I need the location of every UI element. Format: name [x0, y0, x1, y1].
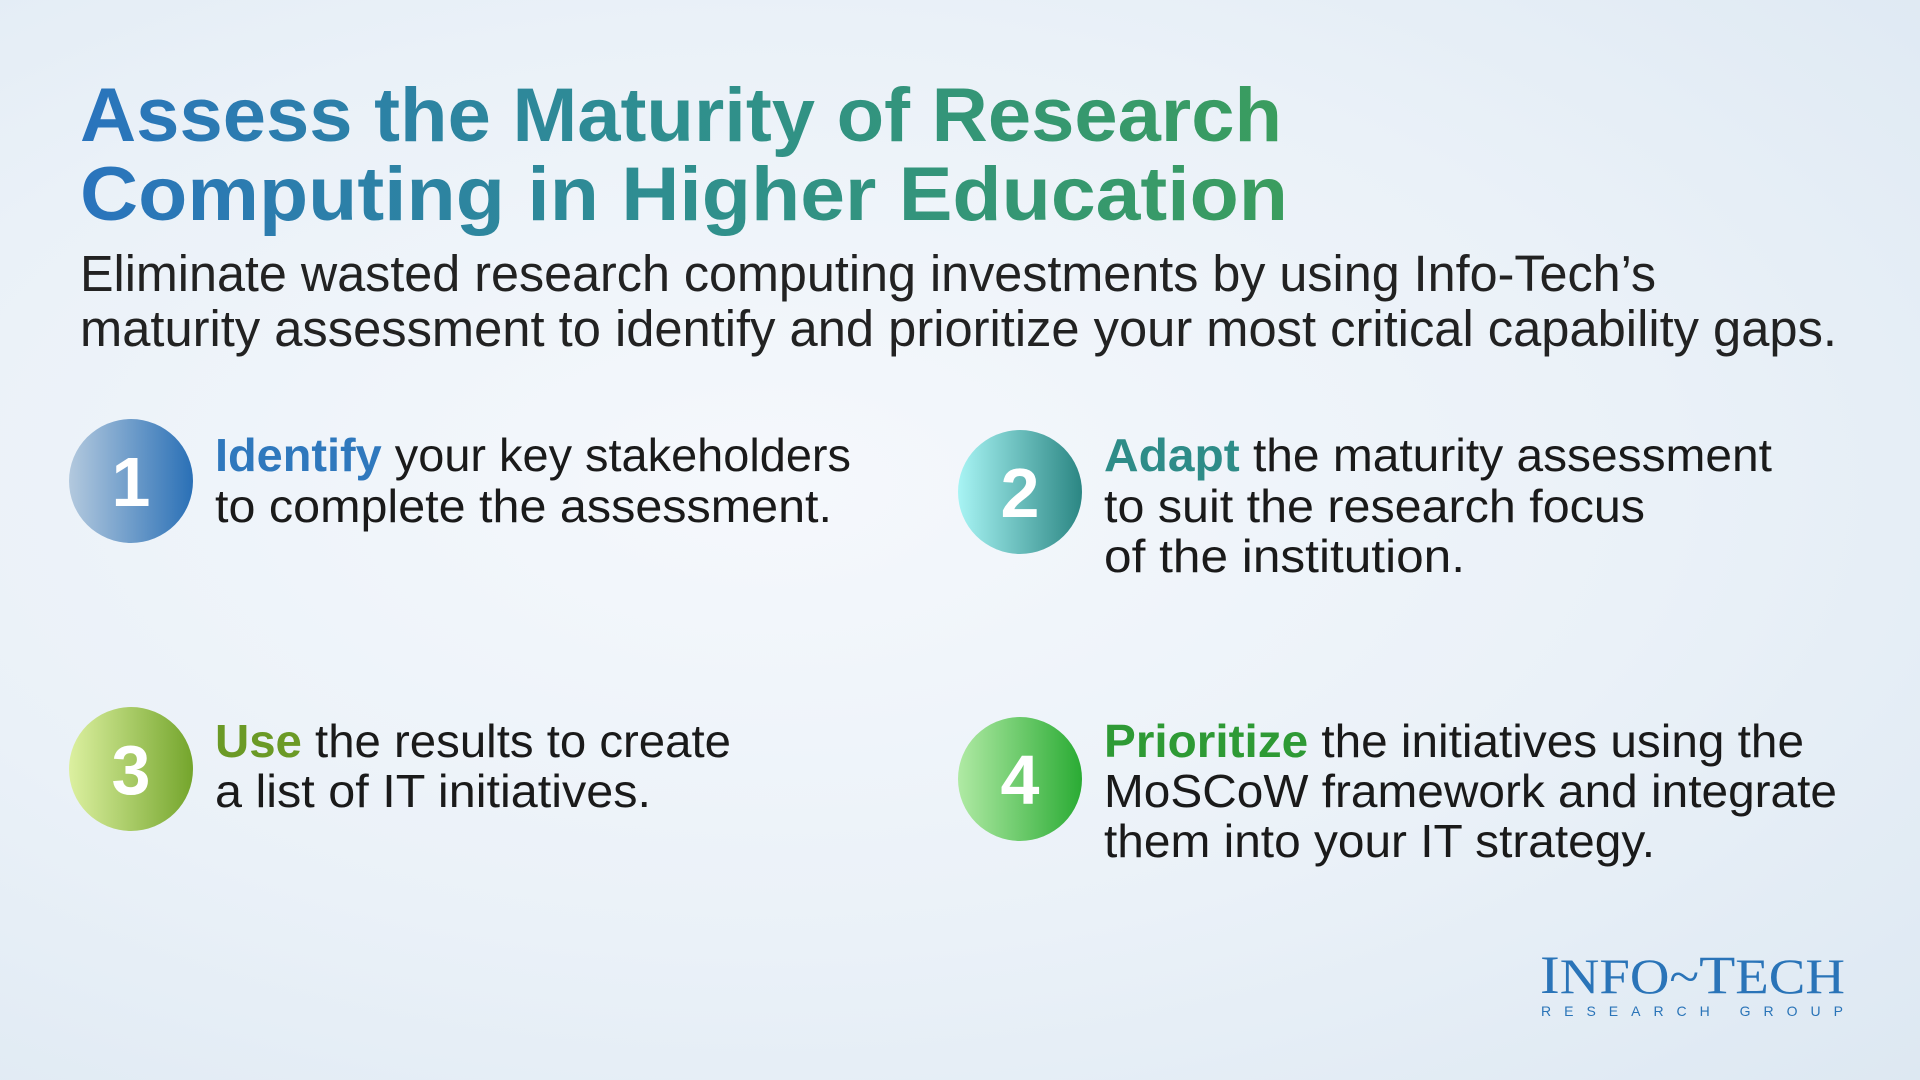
text: step 1 — [215, 429, 851, 532]
text: step 3: Use the results to create — [215, 715, 731, 767]
icon: circle 4 — [958, 717, 1082, 841]
icon: circle 3: 3 — [112, 731, 150, 809]
icon: circle 2 — [958, 430, 1082, 554]
text: step 2: to suit the research focus — [1104, 480, 1645, 532]
text: step 4: them into your IT strategy. — [1104, 815, 1655, 867]
logo: RESEARCH GROUP — [1541, 1003, 1843, 1019]
text: step 2: of the institution. — [1104, 530, 1465, 582]
subtitle — [80, 245, 1837, 357]
subtitle: maturity assessment to identify and prioritize your most critical capability gaps. — [80, 300, 1837, 357]
step 3 — [69, 707, 731, 831]
text: step 2: Adapt the maturity assessment — [1104, 429, 1772, 481]
title: Computing in Higher Education — [80, 152, 1288, 237]
step 4 — [958, 715, 1837, 867]
text: step 1: to complete the assessment. — [215, 480, 832, 532]
text: step 4: Prioritize the initiatives using the — [1104, 715, 1804, 767]
subtitle: Eliminate wasted research computing investments by using Info-Tech’s — [80, 245, 1656, 302]
text: step 4 — [1104, 715, 1837, 867]
title — [80, 73, 1288, 237]
step 1 — [69, 419, 851, 543]
text: step 3: a list of IT initiatives. — [215, 765, 651, 817]
icon: circle 2: 2 — [1001, 454, 1039, 532]
icon: circle 3 — [69, 707, 193, 831]
step 2 — [958, 429, 1772, 582]
text: step 1: Identify your key stakeholders — [215, 429, 851, 481]
text: step 4: MoSCoW framework and integrate — [1104, 765, 1837, 817]
icon: circle 1 — [69, 419, 193, 543]
icon: circle 4: 4 — [1001, 741, 1040, 819]
logo: INFO~TECH — [1540, 945, 1845, 1005]
text: step 3 — [215, 715, 731, 817]
icon: circle 1: 1 — [112, 443, 150, 521]
text: step 2 — [1104, 429, 1772, 582]
title: Assess the Maturity of Research — [80, 73, 1282, 158]
